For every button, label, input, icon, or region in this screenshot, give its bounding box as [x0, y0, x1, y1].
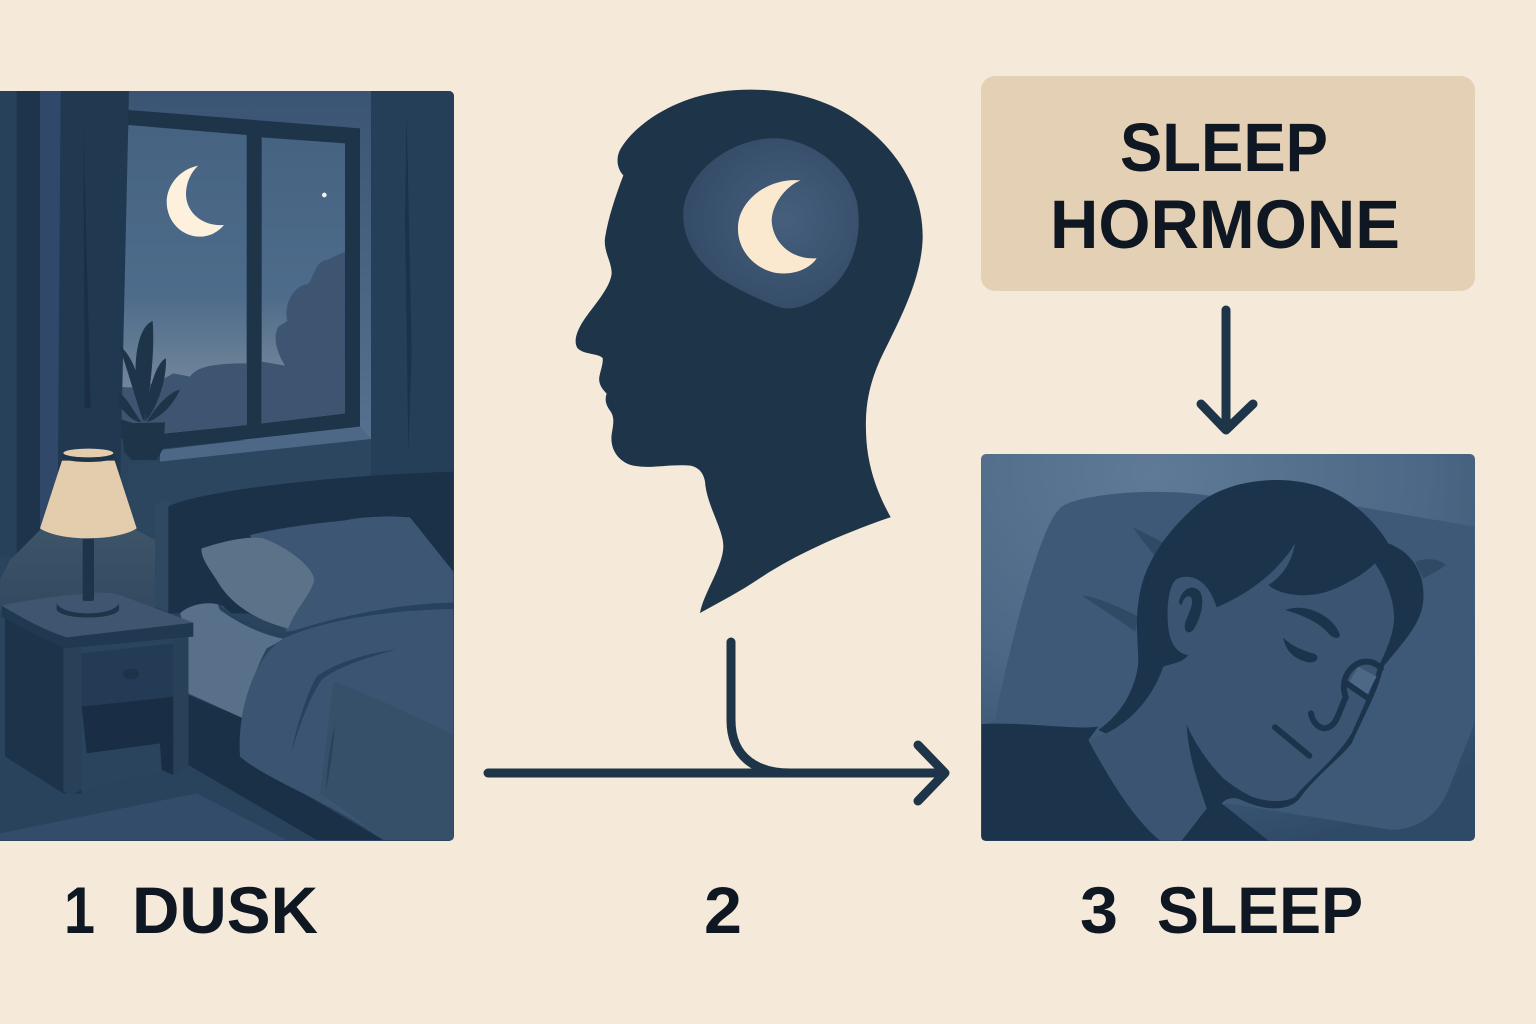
- panel: sleeping person: [981, 454, 1475, 841]
- hair and head outline: [1098, 480, 1424, 841]
- moon: [167, 166, 224, 237]
- floor: [0, 757, 333, 840]
- nightstand: [2, 593, 193, 795]
- arrow: hormone to sleep: [1201, 310, 1253, 430]
- step 3 label: SLEEP: [1157, 873, 1363, 947]
- mouth: [1275, 727, 1309, 756]
- brain glow: [683, 138, 859, 308]
- head silhouette: [576, 90, 923, 613]
- step 2 label: 2: [704, 873, 742, 947]
- shoulder: [982, 724, 1160, 841]
- plant: [119, 321, 180, 460]
- arrow: dusk to sleep with branch: [488, 642, 945, 801]
- step 3 label: 3: [1080, 873, 1118, 947]
- pillow: [982, 492, 1474, 841]
- lamp: [40, 449, 137, 617]
- label text: SLEEP: [1120, 109, 1328, 186]
- curtain left: [16, 91, 129, 553]
- nose line: [1311, 662, 1381, 728]
- moon in head: [738, 180, 817, 273]
- ear detail: [1179, 588, 1202, 632]
- step 1 label: 1: [64, 873, 95, 947]
- eyebrow: [1285, 608, 1340, 638]
- curtain right: [371, 91, 454, 452]
- step 1 label: DUSK: [132, 873, 318, 947]
- panel: sleep hormone label: [981, 76, 1475, 291]
- face and neck: [1088, 543, 1394, 841]
- bed: [155, 472, 453, 840]
- closed eye: [1283, 637, 1317, 662]
- star: [322, 193, 327, 197]
- window wall and window: [0, 90, 454, 557]
- panel: dusk bedroom scene: [0, 90, 454, 841]
- rug: [0, 793, 287, 840]
- lamp glow: [0, 528, 155, 610]
- panel: sleep hormone label: HORMONE: [1050, 186, 1400, 263]
- nose patch: [1348, 667, 1377, 695]
